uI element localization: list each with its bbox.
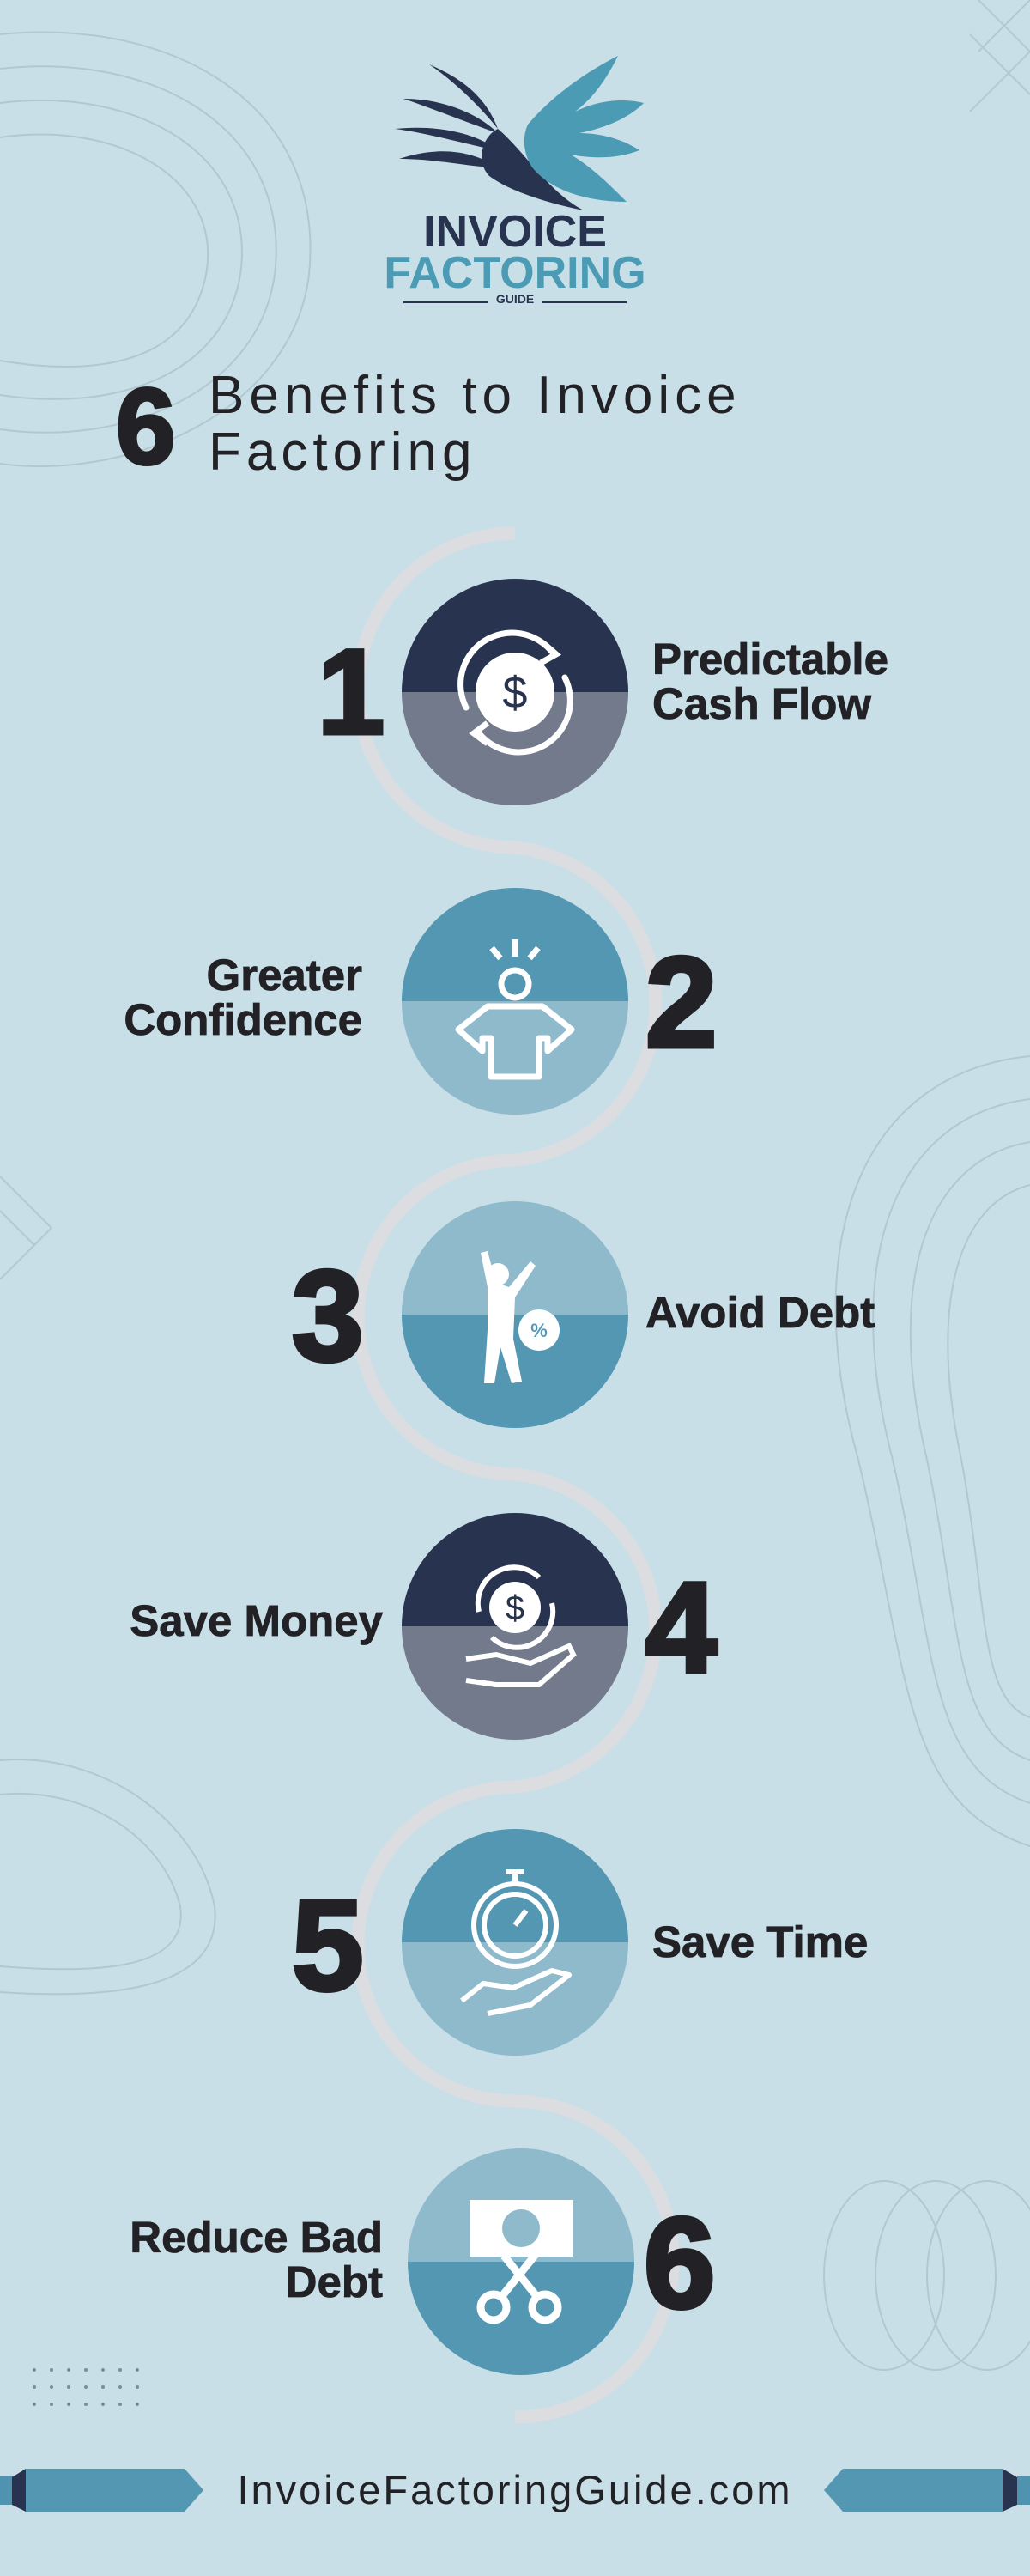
label: Save Money — [130, 1596, 383, 1645]
footer banner — [0, 2467, 1030, 2512]
title: Factoring — [209, 422, 476, 482]
number 1: 1 — [318, 624, 385, 759]
label: Confidence — [124, 995, 362, 1044]
circle icon: avoid debt — [402, 1201, 628, 1428]
step 6 — [130, 2148, 715, 2375]
number 5: 5 — [292, 1873, 363, 2017]
circle icon: cut bill — [408, 2148, 634, 2375]
label: Save Time — [652, 1917, 868, 1966]
logo: GUIDE — [496, 292, 534, 306]
step 1 — [318, 579, 888, 805]
label: Avoid Debt — [645, 1288, 875, 1337]
title: 6 — [116, 368, 176, 487]
website url: InvoiceFactoringGuide.com — [237, 2467, 793, 2512]
number 4: 4 — [645, 1555, 717, 1699]
circle icon: save money: $ — [506, 1589, 524, 1627]
number 3: 3 — [292, 1243, 363, 1388]
label — [652, 635, 888, 728]
label: Debt — [286, 2257, 383, 2306]
circle icon: stopwatch — [402, 1829, 628, 2056]
label: Reduce Bad — [130, 2213, 383, 2262]
label: Greater — [207, 951, 362, 999]
right ribbon — [824, 2469, 1030, 2512]
logo — [384, 56, 646, 306]
left ribbon — [0, 2469, 203, 2512]
circle icon: cash flow: $ — [503, 668, 528, 718]
circle icon: confidence — [402, 888, 628, 1115]
title: Benefits to Invoice — [209, 366, 742, 425]
label: Cash Flow — [652, 679, 871, 728]
step 5 — [292, 1829, 868, 2056]
logo: FACTORING — [384, 248, 646, 298]
circle icon: avoid debt: % — [530, 1320, 548, 1341]
number 6: 6 — [644, 2190, 715, 2335]
step 3 — [292, 1201, 875, 1428]
title — [116, 366, 742, 487]
step 2 — [124, 888, 717, 1115]
icon: eagle wings — [395, 56, 644, 210]
circle icon: save money — [402, 1513, 628, 1740]
label: Predictable — [652, 635, 888, 683]
logo text: INVOICE — [423, 207, 607, 257]
label — [130, 2213, 383, 2306]
step 4 — [130, 1513, 719, 1740]
number 2: 2 — [645, 930, 717, 1074]
circle icon: cash flow — [402, 579, 628, 805]
label — [124, 951, 362, 1044]
